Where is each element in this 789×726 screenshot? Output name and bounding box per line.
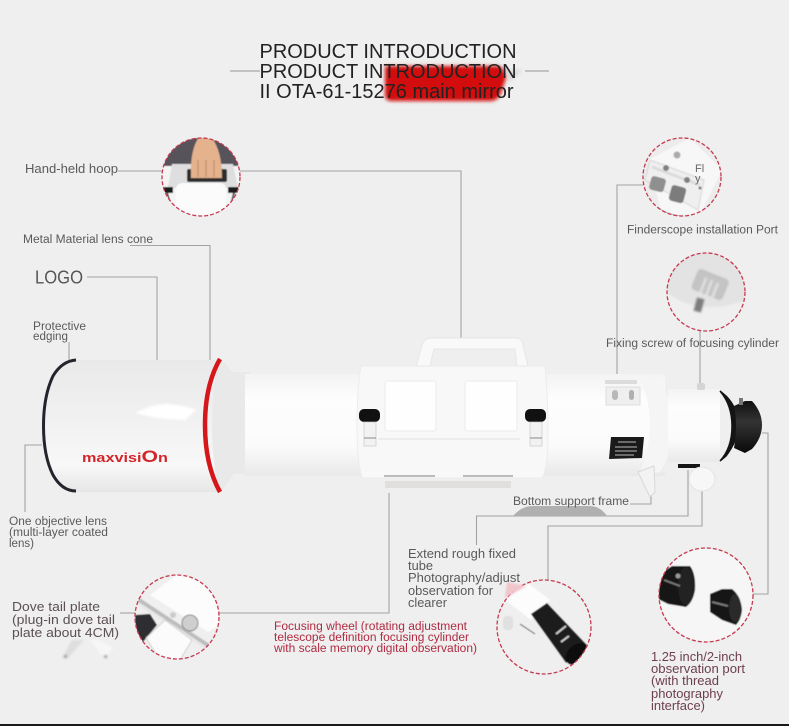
label: focusing wheel xyxy=(273,621,477,655)
rear section xyxy=(668,389,720,462)
label: extend tube: clearer xyxy=(408,596,447,610)
label: fixing screw: Fixing screw of focusing cylinder xyxy=(606,338,779,350)
red metal ring xyxy=(205,359,220,492)
label: focusing wheel: telescope definition focusing cylinder xyxy=(274,632,469,644)
label: protective edging xyxy=(33,321,86,343)
label: observation port: (with thread xyxy=(651,674,719,688)
label: bottom support frame: Bottom support frame xyxy=(513,494,629,508)
label: extend tube: Extend rough fixed xyxy=(408,547,516,561)
ghost marks under dove tail label xyxy=(62,640,114,658)
finderscope port xyxy=(605,380,640,405)
label: observation port: interface) xyxy=(651,699,705,713)
label: extend tube: observation for xyxy=(408,584,493,598)
telescope xyxy=(42,338,762,516)
label: dove tail plate xyxy=(12,599,119,640)
label: objective lens xyxy=(9,516,108,550)
label: focusing wheel: Focusing wheel (rotating adjustment xyxy=(274,621,468,633)
ground shadow xyxy=(513,506,607,516)
inset: finderscope port: Fl xyxy=(695,163,704,175)
rear black ring xyxy=(720,391,738,461)
focusing wheel xyxy=(678,464,715,491)
title block: PRODUCT INTRODUCTION xyxy=(260,41,516,63)
main tube xyxy=(245,374,665,476)
clamp knob left xyxy=(359,409,380,446)
label: observation port: photography xyxy=(651,687,724,701)
label: extend tube: Photography/adjust xyxy=(408,571,521,585)
fixing screw xyxy=(697,383,705,390)
label: protective edging: edging xyxy=(33,331,68,343)
flare and collar xyxy=(212,358,250,493)
inset: extended focuser xyxy=(497,580,593,674)
title block xyxy=(230,41,549,103)
dew shield xyxy=(42,360,218,492)
label: dove tail plate: (plug-in dove tail xyxy=(12,612,115,627)
bottom edge line xyxy=(0,724,789,726)
title block: PRODUCT INTRODUCTION xyxy=(260,61,516,83)
leader lines xyxy=(25,171,768,613)
tube ring xyxy=(638,375,672,476)
label: dove tail plate: plate about 4CM) xyxy=(12,625,119,640)
label: objective lens: lens) xyxy=(9,538,34,550)
tube ring clamp xyxy=(357,366,548,488)
clamp knob right xyxy=(525,409,546,446)
inset: observation ports xyxy=(656,548,753,642)
label: dove tail plate: Dove tail plate xyxy=(12,599,100,614)
label: finderscope port: Finderscope installation Port xyxy=(627,224,779,236)
label: metal lens cone: Metal Material lens cone xyxy=(23,234,153,246)
protective edging ring xyxy=(44,360,76,491)
inset: hand-held hoop xyxy=(160,136,242,218)
label: observation port xyxy=(651,650,746,713)
label: hand-held hoop: Hand-held hoop xyxy=(25,162,118,176)
label: logo: LOGO xyxy=(35,268,83,288)
inset: finderscope port xyxy=(642,137,722,217)
inset: finderscope port: y xyxy=(695,173,701,185)
label: extend tube xyxy=(408,547,521,610)
eyepiece screw xyxy=(739,398,743,405)
label: protective edging: Protective xyxy=(33,321,86,333)
label: focusing wheel: with scale memory digital observation) xyxy=(273,643,477,655)
title block: II OTA-61-15276 main mirror xyxy=(260,81,514,103)
label: extend tube: tube xyxy=(408,559,433,573)
eyepiece xyxy=(734,401,762,453)
label: observation port: observation port xyxy=(651,662,746,676)
support foot xyxy=(638,466,655,497)
label: objective lens: (multi-layer coated xyxy=(9,527,108,539)
inset: fixing screw xyxy=(666,252,746,332)
maxvision logo: maxvisi O n xyxy=(82,447,168,466)
nameplate xyxy=(609,437,644,459)
label: objective lens: One objective lens xyxy=(9,516,107,528)
label: observation port: 1.25 inch/2-inch xyxy=(651,650,742,664)
inset: dove tail plate xyxy=(134,574,220,660)
carrying handle xyxy=(416,338,528,366)
